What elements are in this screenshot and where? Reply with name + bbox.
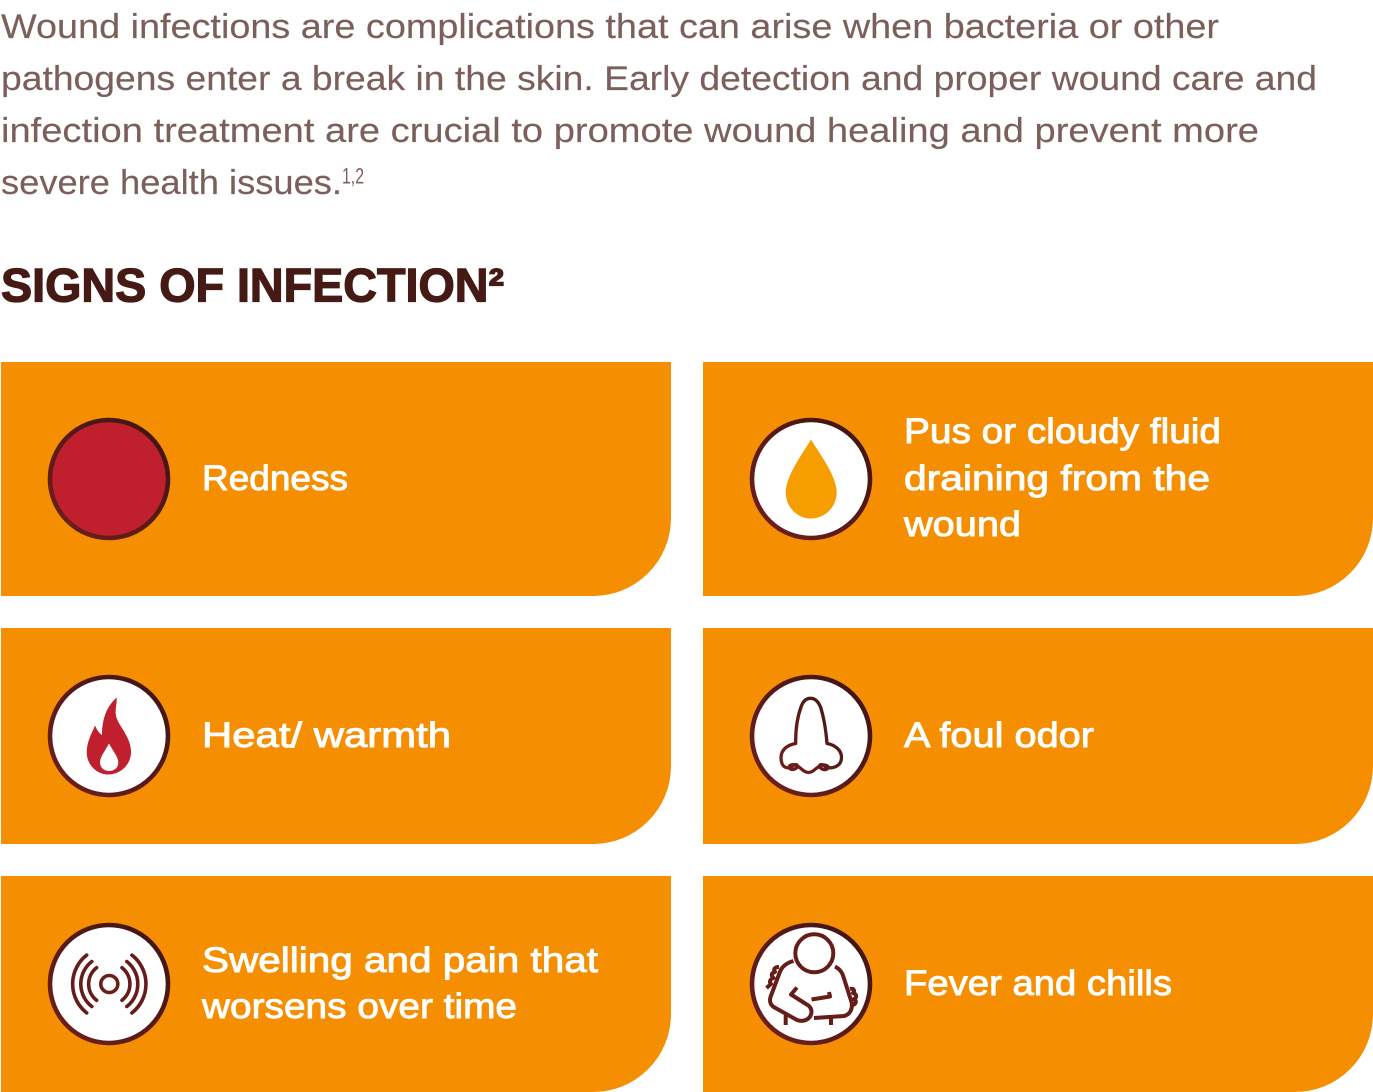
- icon: shivering person: [752, 925, 870, 1043]
- intro paragraph: 1,2: [342, 164, 364, 188]
- icon: red circle: [50, 420, 168, 538]
- label: redness: Redness: [202, 459, 348, 498]
- intro paragraph: infection treatment are crucial to promote wound healing and prevent more: [1, 112, 1259, 150]
- label: pus or cloudy fluid: Pus or cloudy fluid: [904, 412, 1221, 451]
- icon: nose: [752, 677, 870, 795]
- intro paragraph: Wound infections are complications that can arise when bacteria or other: [1, 8, 1219, 46]
- icon: flame: [50, 677, 168, 795]
- panel: foul odor: [703, 628, 1373, 844]
- label: fever and chills: Fever and chills: [904, 964, 1172, 1003]
- heading: signs of infection: SIGNS OF INFECTION²: [1, 258, 504, 312]
- label: pus or cloudy fluid: wound: [903, 505, 1021, 544]
- label: a foul odor: A foul odor: [904, 716, 1094, 755]
- intro paragraph: [1, 8, 1317, 202]
- panel: swelling and pain: [1, 876, 671, 1092]
- label: swelling and pain: worsens over time: [201, 987, 517, 1026]
- panel: fever and chills: [703, 876, 1373, 1092]
- label: pus or cloudy fluid: [903, 412, 1221, 544]
- label: swelling and pain: [201, 941, 598, 1026]
- icon: fluid drop: [752, 420, 870, 538]
- intro paragraph: severe health issues.: [1, 164, 342, 202]
- label: heat and warmth: Heat/ warmth: [202, 716, 451, 755]
- panel: pus or cloudy fluid: [703, 362, 1373, 596]
- label: swelling and pain: Swelling and pain that: [202, 941, 598, 980]
- intro paragraph: pathogens enter a break in the skin. Early detection and proper wound care and: [1, 60, 1317, 98]
- icon: pain radiating rings: [50, 925, 168, 1043]
- panel: heat and warmth: [1, 628, 671, 844]
- panel: redness: [1, 362, 671, 596]
- label: pus or cloudy fluid: draining from the: [904, 459, 1210, 498]
